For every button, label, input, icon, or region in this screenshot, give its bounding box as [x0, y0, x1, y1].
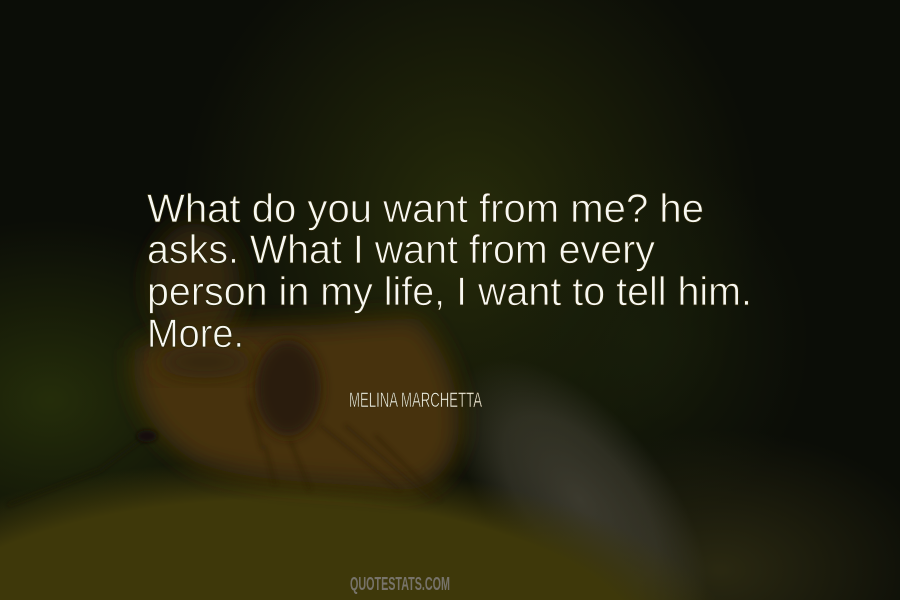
flower centre	[255, 340, 321, 436]
flower	[8, 223, 459, 505]
shadow beside centre	[155, 346, 255, 378]
quote: More.	[147, 312, 244, 356]
lower petal streaks	[250, 400, 440, 500]
flower body	[134, 318, 459, 490]
quote: asks. What I want from every	[147, 228, 655, 272]
author: MELINA MARCHETTA	[349, 389, 482, 412]
quote: What do you want from me? he	[147, 187, 704, 231]
quote	[147, 187, 752, 356]
dark spot	[137, 430, 157, 442]
watermark: QUOTESTATS.COM	[350, 574, 450, 594]
quote: person in my life, I want to tell him.	[147, 270, 752, 314]
upper petals	[150, 223, 240, 347]
dark twig at left	[8, 436, 146, 505]
